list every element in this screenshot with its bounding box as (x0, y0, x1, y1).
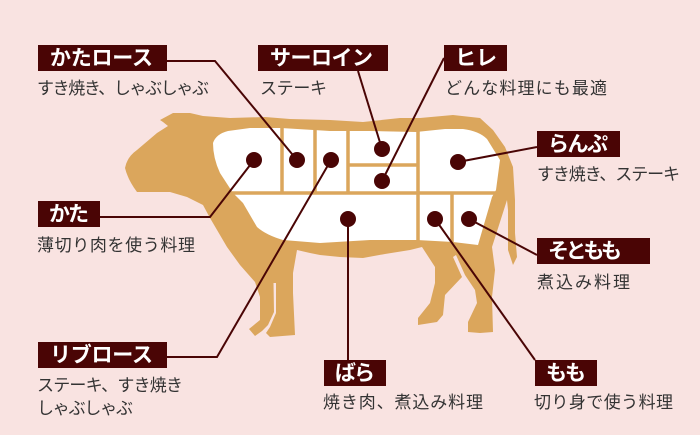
callout: サーロイン: サーロイン (270, 47, 373, 70)
callout: そともも: 煮込み料理 (537, 273, 630, 292)
callout: ばら: ばら (335, 362, 375, 385)
callout: そともも (537, 238, 650, 292)
callout: かた: かた (49, 203, 89, 226)
callout: ヒレ: どんな料理にも最適 (445, 79, 607, 98)
callout: かた (37, 201, 195, 255)
callout: ヒレ: ヒレ (455, 47, 497, 70)
callout: ばら (323, 360, 483, 412)
callout: かた: 薄切り肉を使う料理 (37, 235, 195, 255)
callout: リブロース (37, 342, 183, 418)
cow diagram (100, 58, 537, 360)
callout: もも: もも (546, 362, 586, 385)
callout: サーロイン (258, 45, 388, 98)
callout: かたロース: すき焼き、しゃぶしゃぶ (37, 79, 209, 98)
callout: もも (534, 360, 673, 412)
callout: リブロース: リブロース (50, 343, 153, 367)
callout: リブロース: ステーキ、すき焼き (37, 376, 183, 395)
white cuts area (213, 128, 500, 245)
callout: ヒレ (444, 45, 607, 98)
callout: らんぷ: らんぷ (548, 133, 608, 156)
callout: かたロース (37, 45, 209, 98)
callout: らんぷ: すき焼き、ステーキ (537, 165, 680, 184)
callout: そともも: そともも (548, 240, 622, 263)
callout: かたロース: かたロース (50, 47, 153, 70)
cut dividers (232, 127, 496, 243)
connector lines (100, 58, 537, 360)
cow silhouette (125, 113, 517, 337)
callout: リブロース: しゃぶしゃぶ (37, 399, 133, 418)
callout: らんぷ (537, 131, 680, 184)
callout: もも: 切り身で使う料理 (534, 392, 673, 412)
cut markers (246, 141, 477, 227)
callout: ばら: 焼き肉、煮込み料理 (323, 393, 483, 412)
callout: サーロイン: ステーキ (260, 79, 327, 98)
